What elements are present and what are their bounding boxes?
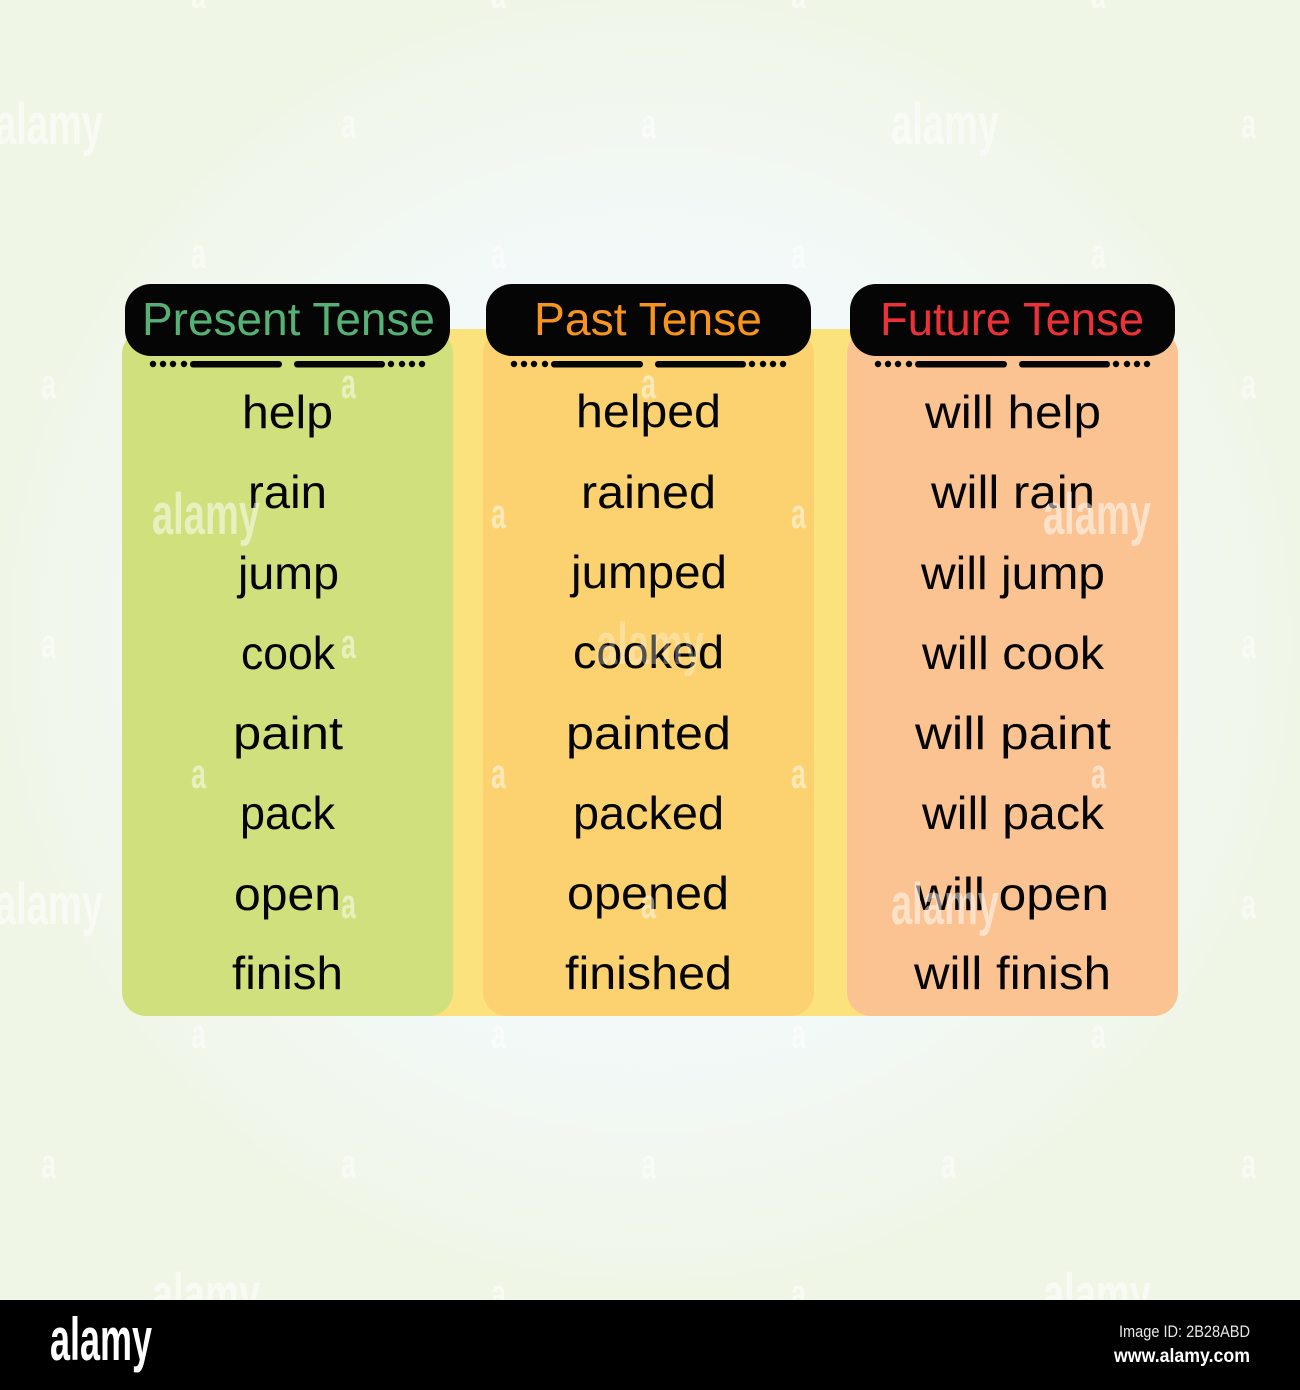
watermarks: alamy — [152, 1262, 260, 1327]
panel: future tense — [847, 284, 1178, 1016]
yellow backing band — [430, 329, 870, 1016]
watermarks: a — [341, 880, 356, 927]
watermarks: a — [491, 750, 506, 797]
watermarks: a — [341, 620, 356, 667]
website: www.alamy.com — [1113, 1346, 1250, 1367]
watermarks: a — [191, 750, 206, 797]
present word list: cook — [241, 627, 336, 679]
watermarks: a — [41, 1140, 56, 1187]
watermarks: a — [1241, 880, 1256, 927]
watermarks: a — [491, 490, 506, 537]
future word list: will rain — [930, 466, 1095, 518]
watermarks: a — [791, 230, 806, 277]
watermarks: a — [641, 880, 656, 927]
watermarks: a — [1091, 1010, 1106, 1057]
watermarks: a — [641, 360, 656, 407]
watermarks: a — [341, 1140, 356, 1187]
present word list: rain — [248, 466, 327, 518]
present divider — [150, 361, 425, 368]
present word list: open — [234, 868, 341, 920]
past word list: jumped — [569, 546, 727, 598]
watermarks: a — [791, 1010, 806, 1057]
image id: Image ID: 2B28ABD — [1119, 1322, 1250, 1341]
watermarks: a — [191, 1010, 206, 1057]
present heading pill: Present Tense — [142, 293, 435, 345]
panel: present tense — [122, 284, 453, 1016]
watermarks: a — [41, 620, 56, 667]
past divider — [511, 361, 786, 368]
panel: past tense — [483, 284, 814, 1016]
past word list: rained — [581, 466, 716, 518]
watermarks: a — [941, 1140, 956, 1187]
present word list: finish — [232, 947, 343, 999]
watermarks: a — [1241, 360, 1256, 407]
present word list: paint — [233, 707, 343, 759]
watermarks: a — [1241, 620, 1256, 667]
watermarks: a — [791, 1270, 806, 1317]
future heading pill: Future Tense — [880, 293, 1144, 345]
future word list: will jump — [920, 547, 1105, 599]
past panel background — [483, 330, 814, 1016]
watermarks: alamy — [152, 482, 260, 547]
watermarks: a — [1091, 230, 1106, 277]
future panel background — [847, 330, 1178, 1016]
past heading pill: Past Tense — [534, 293, 762, 345]
present word list: jump — [236, 547, 339, 599]
watermarks: alamy — [596, 612, 704, 677]
past word list: opened — [567, 867, 729, 919]
watermarks: alamy — [891, 872, 999, 937]
past word list: cooked — [573, 626, 724, 678]
watermarks: a — [791, 490, 806, 537]
future word list: will open — [915, 868, 1109, 920]
watermarks: a — [1241, 1140, 1256, 1187]
future word list: will paint — [914, 707, 1111, 759]
future word list — [913, 386, 1111, 999]
past word list — [565, 385, 732, 999]
present panel background — [122, 330, 453, 1016]
watermarks: a — [641, 1140, 656, 1187]
past heading pill — [486, 284, 811, 356]
past word list: helped — [576, 385, 721, 437]
present word list: pack — [240, 787, 336, 839]
watermarks: a — [491, 1270, 506, 1317]
watermarks: alamy — [891, 92, 999, 157]
future word list: will cook — [921, 627, 1105, 679]
watermarks: a — [341, 100, 356, 147]
present heading pill — [125, 284, 450, 356]
present word list — [232, 386, 343, 999]
watermarks: a — [41, 360, 56, 407]
watermarks: a — [641, 100, 656, 147]
footer bar — [0, 1300, 1300, 1390]
watermarks: a — [341, 360, 356, 407]
past word list: packed — [573, 787, 724, 839]
present word list: help — [242, 386, 333, 438]
future word list: will help — [924, 386, 1101, 438]
future divider — [875, 361, 1150, 368]
past word list: painted — [566, 707, 731, 759]
watermarks: a — [491, 1010, 506, 1057]
watermarks: a — [191, 230, 206, 277]
watermarks: a — [491, 230, 506, 277]
past word list: finished — [565, 947, 732, 999]
watermarks: alamy — [1043, 1262, 1151, 1327]
watermarks: a — [1091, 750, 1106, 797]
watermarks: a — [1241, 100, 1256, 147]
future word list: will finish — [913, 947, 1111, 999]
watermarks: alamy — [1043, 482, 1151, 547]
watermarks: a — [791, 750, 806, 797]
future word list: will pack — [921, 787, 1105, 839]
footer logo: alamy — [50, 1306, 152, 1373]
future heading pill — [850, 284, 1175, 356]
